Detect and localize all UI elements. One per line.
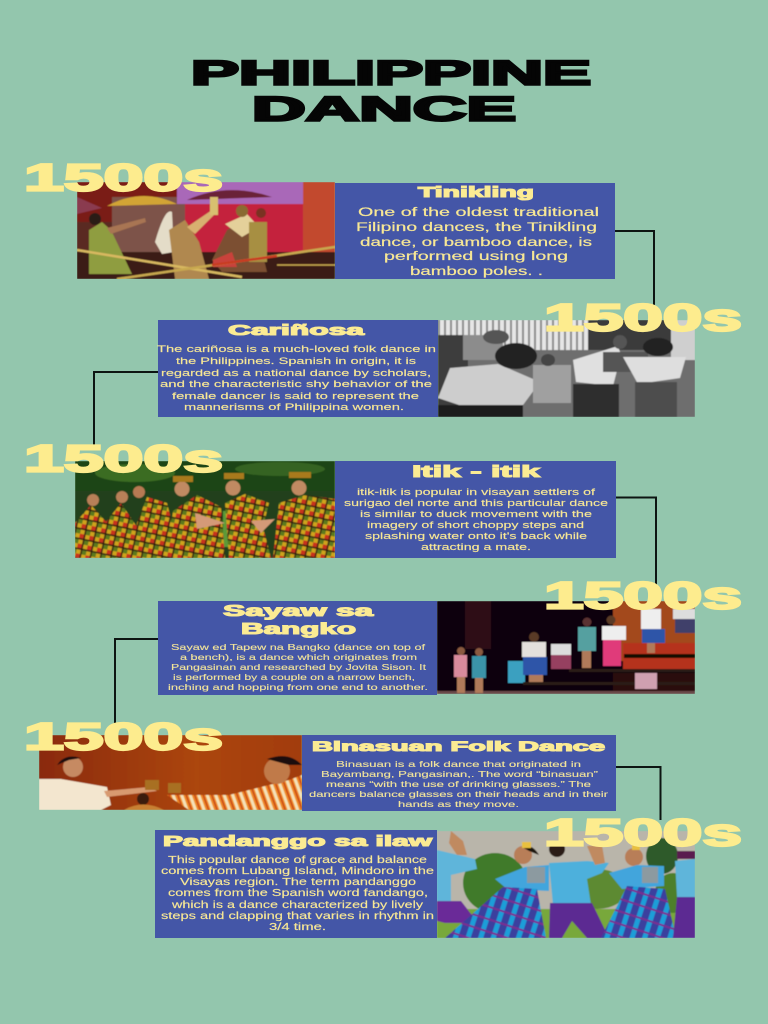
photo: Itik-itik dancers in plaid costumes [75,461,335,558]
body text: the Philippines. Spanish in origin, it is [176,356,416,367]
heading: Sayaw sa [223,603,373,620]
era label 2: 1500s [544,298,742,340]
body text [356,205,599,278]
body text: imagery of short choppy steps and [367,520,584,531]
body text: means “with the use of drinking glasses.” The [326,779,591,789]
photo: Pandanggo sa ilaw dancers in blue [437,831,695,938]
connector: Cariñosa to next era [94,372,158,447]
text box [335,183,615,279]
era label 4: 1500s [544,576,742,618]
body text: mannerisms of Philippina women. [184,402,404,413]
body text [168,642,428,692]
body text: itik-itik is popular in visayan settlers of [357,487,595,498]
panel: Binasuan Folk Dance [39,735,616,811]
body text: One of the oldest traditional [358,205,599,219]
text box [158,320,438,417]
connector: Itik-itik to next era [616,498,656,585]
body text: This popular dance of grace and balance [168,855,427,866]
text box [155,830,437,938]
photo: Tinikling dancers with bamboo poles [77,182,335,279]
body text: surigao del norte and this particular dance [344,498,608,509]
body text: which is a dance characterized by lively [171,900,424,911]
era label 5: 1500s [24,716,223,758]
body text [161,855,434,933]
heading: Itik - itik [412,462,541,481]
text box [335,461,616,558]
heading: Binasuan Folk Dance [312,738,605,754]
body text: a bench), is a dance which originates from [180,652,417,662]
body text: and the characteristic shy behavior of the [160,379,432,390]
body text: Filipino dances, the Tinikling [356,220,597,234]
panel: Itik-itik [75,461,616,558]
heading: Cariñosa [228,322,365,339]
era label 3: 1500s [24,438,223,480]
body text: Sayaw ed Tapew na Bangko (dance on top of [171,642,426,652]
body text: dance, or bamboo dance, is [360,235,592,249]
photo: Binasuan dancers with drinking glasses [39,735,302,810]
body text: dancers balance glasses on their heads and in their [309,789,608,799]
body text: Visayas region. The term pandanggo [180,877,416,888]
body text: The cariñosa is a much-loved folk dance in [157,344,436,355]
text box [158,601,437,695]
connector: Tinikling to next era [615,231,654,306]
body text: regarded as a national dance by scholars, [161,368,431,379]
body text [309,759,608,809]
body text [344,487,608,553]
panel: Sayaw sa Bangko [158,601,695,695]
body text: hands as they move. [398,799,519,809]
text box [302,735,616,811]
connector: Sayaw sa Bangko to next era [115,639,158,725]
body text: comes from Lubang Island, Mindoro in the [161,866,434,877]
title [191,54,591,128]
photo: Sayaw sa Bangko dancers on benches [437,601,695,694]
body text [157,344,436,413]
body text: steps and clapping that varies in rhythm in [161,911,434,922]
connector: Binasuan to next era [616,767,660,820]
panel: Tinikling [77,182,615,279]
panel: Cariñosa [157,320,695,417]
title: DANCE [252,90,516,128]
body text: Bayambang, Pangasinan,. The word “binasuan” [321,769,598,779]
body text: inching and hopping from one end to another. [168,682,428,692]
body text: Binasuan is a folk dance that originated in [336,759,581,769]
panel: Sayaw sa Bangko: Bangko [241,621,356,638]
body text: bamboo poles. . [410,264,543,278]
body text: 3/4 time. [269,922,326,933]
photo: black and white Cariñosa dancers [438,320,695,417]
body text: performed using long [384,249,568,263]
era label 6: 1500s [544,812,742,854]
body text: splashing water onto it's back while [365,531,587,542]
title: PHILIPPINE [191,54,591,92]
body text: is performed by a couple on a narrow bench, [173,672,415,682]
heading: Tinikling [418,184,534,201]
body text: Pangasinan and researched by Jovita Sison. It [171,662,427,672]
panel: Pandanggo sa ilaw [155,830,695,938]
body text: comes from the Spanish word fandango, [168,888,428,899]
body text: female dancer is said to represent the [172,391,419,402]
era label 1: 1500s [24,158,223,200]
heading: Pandanggo sa ilaw [163,833,433,850]
body text: is similar to duck movement with the [360,509,592,520]
body text: attracting a mate. [421,542,531,553]
